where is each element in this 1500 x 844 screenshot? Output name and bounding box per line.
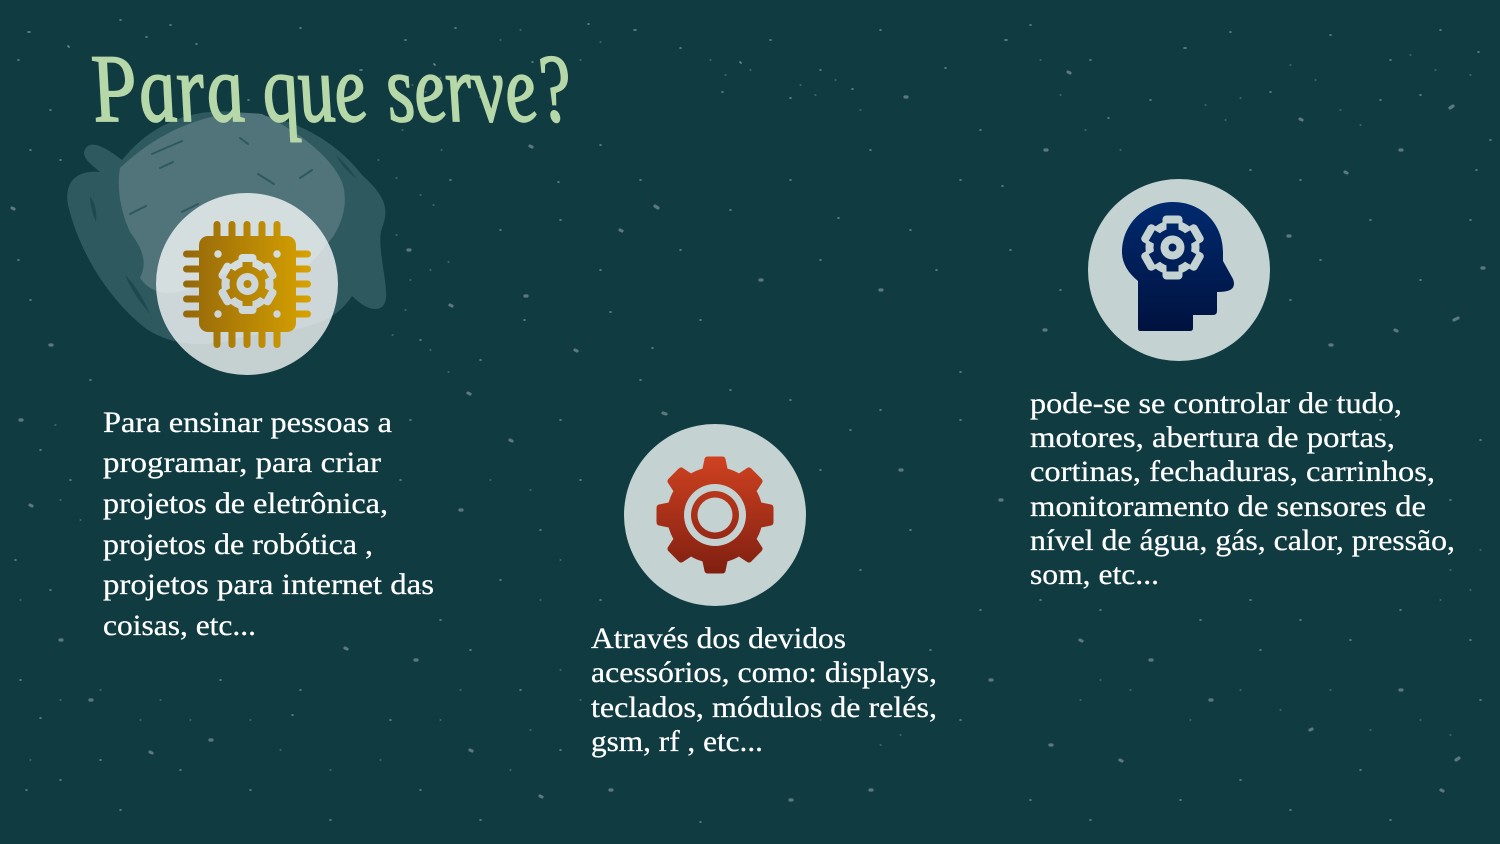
text block: middle column: Através dos devidos [591,622,846,655]
title: que [250,36,375,143]
icon: microchip with gear [156,193,338,375]
text block: right column: pode-se se controlar de tudo, [1030,387,1402,420]
scribble behind the chip icon [67,111,386,344]
text block: left column: Para ensinar pessoas a [103,406,392,439]
title: Para [80,36,253,143]
text block: middle column [591,622,937,758]
title [80,36,581,143]
text block: right column: som, etc... [1030,558,1159,591]
text block: left column: programar, para criar [103,446,381,479]
icon: red gear [624,424,806,606]
text block: left column: coisas, etc... [103,609,256,642]
icon: head with gear [1088,179,1270,361]
text block: right column: cortinas, fechaduras, carrinhos, [1030,455,1435,488]
text block: middle column: teclados, módulos de relés, [591,691,937,724]
text block: left column: projetos para internet das [103,568,434,601]
text block: left column [103,406,434,642]
title: serve? [374,36,581,143]
text block: middle column: gsm, rf , etc... [591,725,763,758]
text block: right column: monitoramento de sensores de [1030,490,1426,523]
text block: left column: projetos de robótica , [103,528,373,561]
text block: right column: nível de água, gás, calor, pressão, [1030,524,1455,557]
text block: middle column: acessórios, como: displays, [591,656,937,689]
text block: right column: motores, abertura de portas, [1030,421,1395,454]
text block: left column: projetos de eletrônica, [103,487,388,520]
text block: right column [1030,387,1455,591]
